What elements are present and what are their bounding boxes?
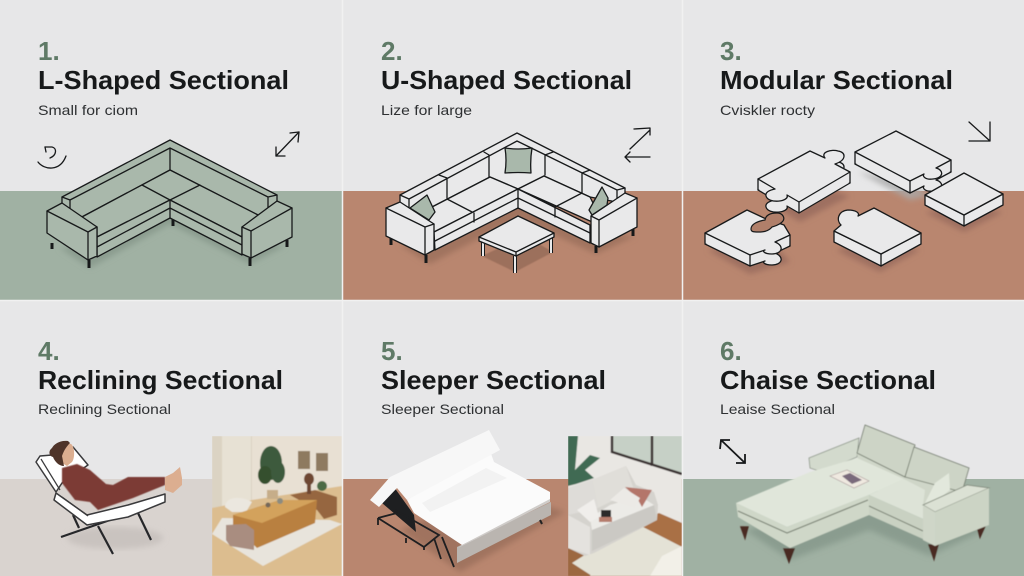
- module: square block right: [925, 173, 1003, 226]
- heading: L-shaped: L-Shaped Sectional: [38, 65, 289, 95]
- heading: sleeper: 5.: [381, 336, 403, 366]
- heading: U-shaped: [381, 36, 632, 118]
- illustration: chaise sofa: [736, 425, 989, 562]
- heading: modular: 3.: [720, 36, 742, 66]
- heading: reclining: 4.: [38, 336, 60, 366]
- pillow: left: [410, 195, 435, 220]
- module: jigsaw piece bottom left: [705, 210, 790, 266]
- illustration: sleeper bed: [370, 430, 565, 572]
- panel: reclining sectional: [0, 342, 342, 576]
- panel: sleeper sectional: [343, 342, 682, 576]
- heading: L-shaped: Small for ciom: [38, 102, 138, 118]
- panel: L-shaped sectional: [0, 0, 342, 300]
- heading: sleeper: [381, 336, 606, 417]
- arrow: diagonal: [969, 122, 990, 141]
- heading: L-shaped: 1.: [38, 36, 60, 66]
- illustration: person in recliner: [36, 441, 182, 554]
- pillow: right: [589, 187, 608, 215]
- shadows under modules: [708, 172, 1003, 274]
- heading: modular: Cviskler rocty: [720, 102, 815, 118]
- heading: U-shaped: Lize for large: [381, 102, 472, 118]
- heading: chaise: [720, 336, 936, 417]
- heading: modular: [720, 36, 953, 118]
- panel: modular sectional: [683, 0, 1024, 300]
- photo: white sofa in bright room: [568, 436, 682, 576]
- heading: U-shaped: 2.: [381, 36, 403, 66]
- heading: reclining: [38, 336, 283, 417]
- illustration: coffee table: [479, 216, 554, 273]
- module: jigsaw piece bottom center: [834, 208, 921, 266]
- illustration: L-shaped sofa: [47, 140, 292, 268]
- heading: chaise: Leaise Sectional: [720, 401, 835, 417]
- arrow: diagonal double: [720, 440, 745, 463]
- heading: modular: Modular Sectional: [720, 65, 953, 95]
- pillow: center: [505, 148, 532, 173]
- heading: L-shaped: [38, 36, 289, 118]
- photo: living room with wooden table: [212, 436, 342, 576]
- hole in piece: [751, 213, 784, 232]
- heading: reclining: Reclining Sectional: [38, 365, 283, 395]
- magazine: [830, 470, 869, 488]
- illustration: U-shaped sofa: [386, 133, 637, 264]
- heading: reclining: Reclining Sectional: [38, 401, 171, 417]
- icon: partial circle: [38, 147, 66, 168]
- heading: chaise: 6.: [720, 336, 742, 366]
- heading: sleeper: Sleeper Sectional: [381, 401, 504, 417]
- panel: U-shaped sectional: [343, 0, 682, 300]
- module: jigsaw piece top right: [855, 131, 951, 193]
- arrow: resize: [276, 132, 299, 156]
- module: jigsaw piece top left: [758, 150, 850, 213]
- heading: chaise: Chaise Sectional: [720, 365, 936, 395]
- heading: sleeper: Sleeper Sectional: [381, 365, 606, 395]
- panel: chaise sectional: [683, 301, 1024, 576]
- arrows: resize pair: [625, 128, 650, 162]
- heading: U-shaped: U-Shaped Sectional: [381, 65, 632, 95]
